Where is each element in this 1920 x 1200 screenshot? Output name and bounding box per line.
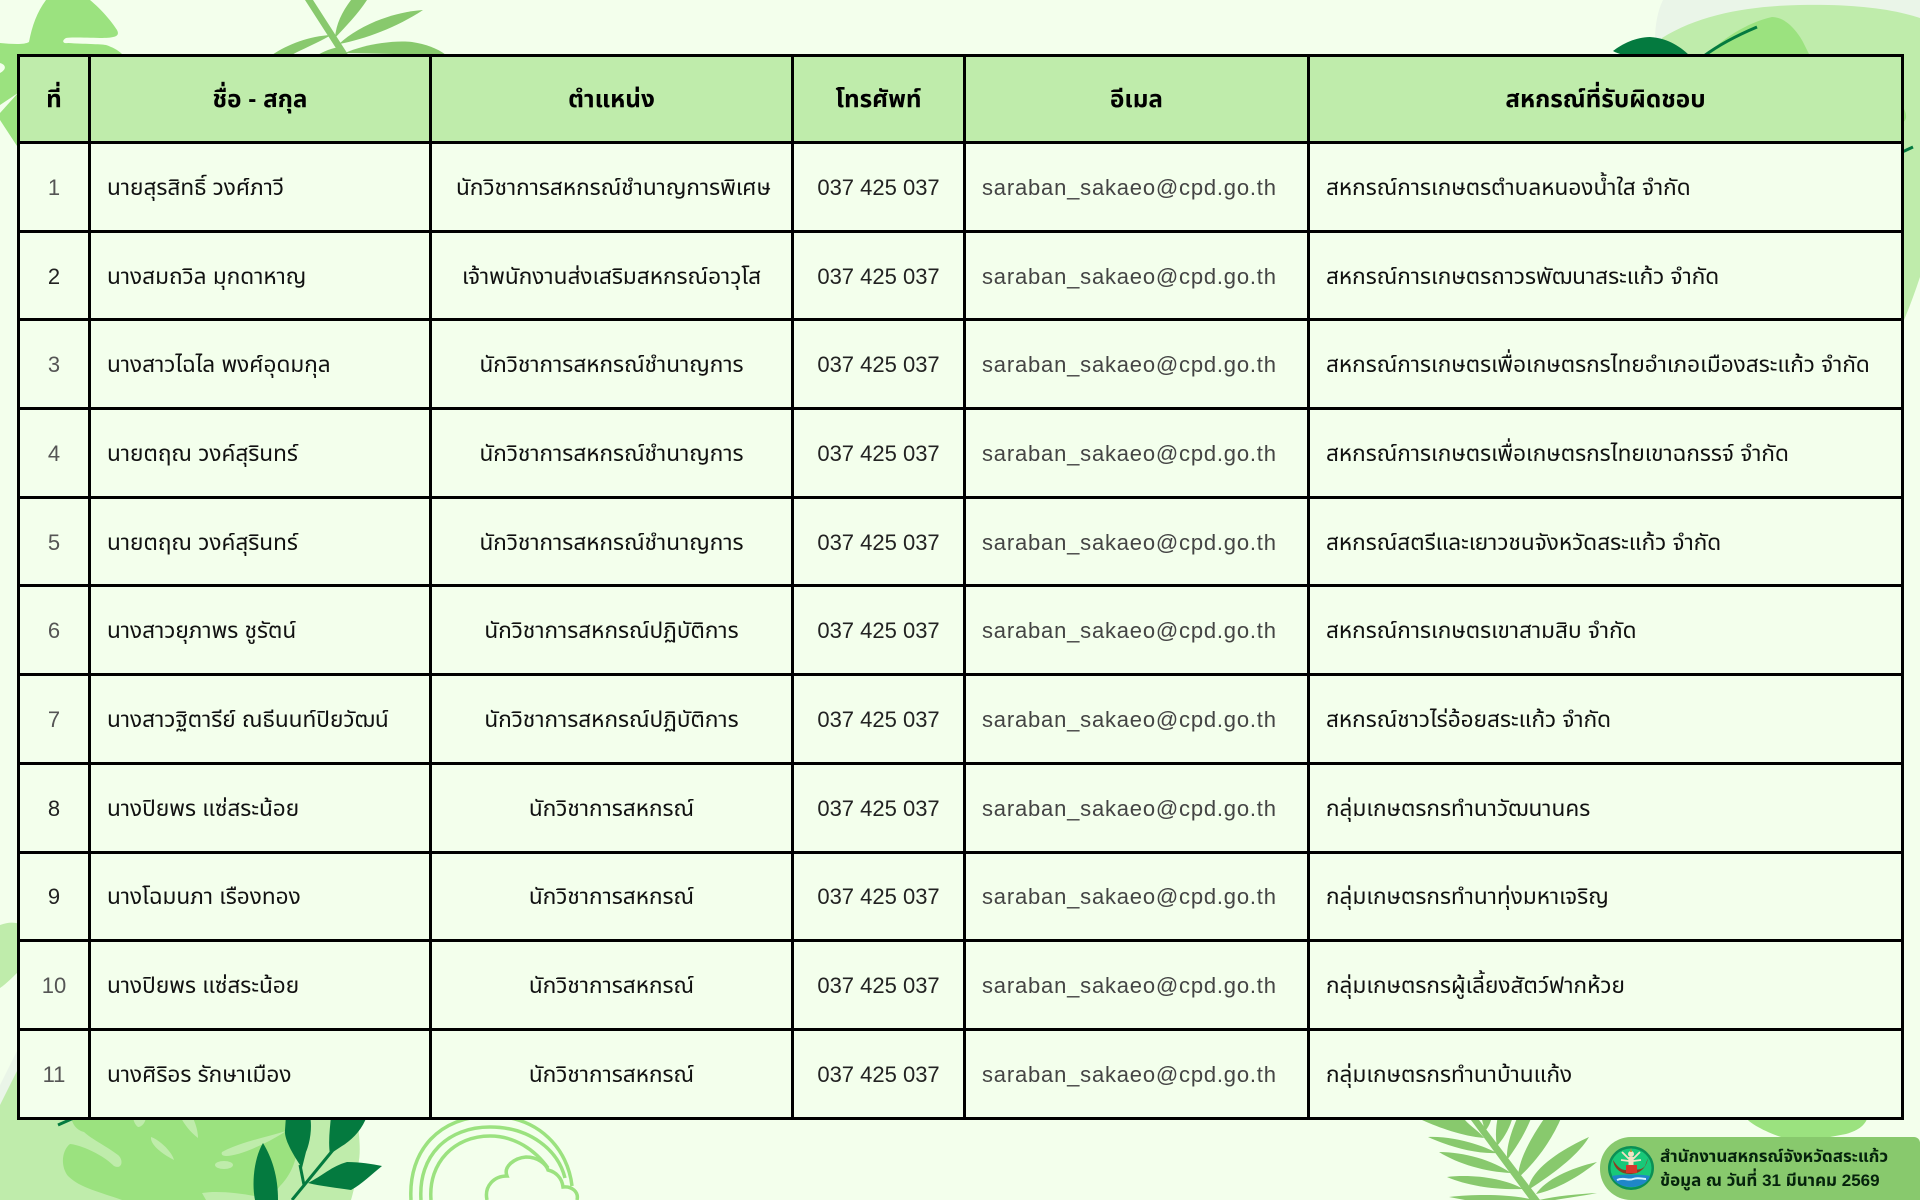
footer line 1: สำนักงานสหกรณ์จังหวัดสระแก้ว — [1660, 1147, 1888, 1166]
leaf: bottom-left monstera group — [0, 1110, 360, 1200]
leaf: bottom-right blob — [1744, 1116, 1868, 1137]
row 11: saraban_sakaeo@cpd.go.th — [982, 1062, 1277, 1087]
row 1 — [48, 172, 1691, 201]
row 3: 037 425 037 — [817, 352, 940, 377]
row 6: saraban_sakaeo@cpd.go.th — [982, 618, 1277, 643]
leaf: bottom-right palm — [1422, 1116, 1597, 1200]
row 7: สหกรณ์ชาวไร่อ้อยสระแก้ว จำกัด — [1326, 707, 1611, 732]
row 10: 10 — [42, 973, 66, 998]
leaf: top-right blobs — [1613, 0, 1920, 320]
row 11: นางศิริอร รักษาเมือง — [107, 1062, 292, 1087]
row 1: นักวิชาการสหกรณ์ชำนาญการพิเศษ — [456, 175, 771, 200]
row 5: นายตฤณ วงค์สุรินทร์ — [107, 530, 298, 555]
row 11 — [43, 1062, 1572, 1088]
row 8: นางปิยพร แซ่สระน้อย — [107, 796, 299, 821]
row 8: 8 — [48, 796, 60, 821]
row 6: 037 425 037 — [817, 618, 940, 643]
row 5: 5 — [48, 530, 60, 555]
row 4: 037 425 037 — [817, 441, 940, 466]
table header row: ชื่อ - สกุล — [213, 86, 307, 112]
row 10 — [42, 970, 1625, 999]
row 9: saraban_sakaeo@cpd.go.th — [982, 884, 1277, 909]
leaf: top-left monstera — [0, 0, 122, 146]
row 1: นายสุรสิทธิ์ วงศ์ภาวี — [107, 175, 284, 200]
row 3 — [48, 349, 1870, 378]
leaf: top bamboo sprig — [272, 0, 446, 56]
table header row: โทรศัพท์ — [835, 86, 922, 112]
table header row: อีเมล — [1110, 86, 1163, 112]
row 9: กลุ่มเกษตรกรทำนาทุ่งมหาเจริญ — [1326, 884, 1609, 909]
table header row: สหกรณ์ที่รับผิดชอบ — [1505, 86, 1706, 112]
table header row: ตำแหน่ง — [568, 86, 655, 112]
row 2 — [48, 264, 1719, 290]
row 8: 037 425 037 — [817, 796, 940, 821]
row 2: สหกรณ์การเกษตรถาวรพัฒนาสระแก้ว จำกัด — [1326, 264, 1719, 289]
row 10: นักวิชาการสหกรณ์ — [529, 973, 694, 998]
icon: cooperative logo — [1608, 1146, 1654, 1190]
row 7: 037 425 037 — [817, 707, 940, 732]
footer line 2: ข้อมูล ณ วันที่ 31 มีนาคม 2569 — [1660, 1171, 1880, 1190]
icon: rainbow and cloud outline — [411, 1116, 577, 1200]
row 3: 3 — [48, 352, 60, 377]
row 10: นางปิยพร แซ่สระน้อย — [107, 973, 299, 998]
row 9: นักวิชาการสหกรณ์ — [529, 884, 694, 909]
row 5: saraban_sakaeo@cpd.go.th — [982, 530, 1277, 555]
leaf: left edge blob — [0, 923, 20, 1125]
row 2: saraban_sakaeo@cpd.go.th — [982, 264, 1277, 289]
row 7: นักวิชาการสหกรณ์ปฏิบัติการ — [484, 707, 739, 732]
row 4: สหกรณ์การเกษตรเพื่อเกษตรกรไทยเขาฉกรรจ์ จำกัด — [1326, 441, 1789, 466]
row 3: นักวิชาการสหกรณ์ชำนาญการ — [479, 352, 744, 377]
row 6: นางสาวยุภาพร ชูรัตน์ — [107, 618, 296, 643]
row 7: 7 — [48, 707, 60, 732]
leaf: bottom-left dark sprig — [254, 1116, 382, 1200]
row 11: นักวิชาการสหกรณ์ — [529, 1062, 694, 1087]
row 4: นักวิชาการสหกรณ์ชำนาญการ — [479, 441, 744, 466]
row 5: สหกรณ์สตรีและเยาวชนจังหวัดสระแก้ว จำกัด — [1326, 530, 1721, 555]
row 7: นางสาวฐิตารีย์ ณธีนนท์ปิยวัฒน์ — [107, 707, 389, 732]
row 9: 037 425 037 — [817, 884, 940, 909]
row 11: กลุ่มเกษตรกรทำนาบ้านแก้ง — [1326, 1062, 1572, 1087]
footer badge — [1600, 1137, 1920, 1200]
row 6: นักวิชาการสหกรณ์ปฏิบัติการ — [484, 618, 739, 643]
row 11: 11 — [43, 1062, 65, 1087]
row 7: saraban_sakaeo@cpd.go.th — [982, 707, 1277, 732]
row 6: 6 — [48, 618, 60, 643]
row 11: 037 425 037 — [817, 1062, 940, 1087]
row 5: นักวิชาการสหกรณ์ชำนาญการ — [479, 530, 744, 555]
row 9: 9 — [48, 884, 60, 909]
row 1: saraban_sakaeo@cpd.go.th — [982, 175, 1277, 200]
row 3: สหกรณ์การเกษตรเพื่อเกษตรกรไทยอำเภอเมืองสระแก้ว จำกัด — [1326, 352, 1870, 377]
row 5: 037 425 037 — [817, 530, 940, 555]
row 7 — [48, 707, 1611, 732]
row 4 — [48, 438, 1789, 467]
row 2: 037 425 037 — [817, 264, 940, 289]
row 3: นางสาวไฉไล พงศ์อุดมกุล — [107, 352, 331, 377]
row 9: นางโฉมนภา เรืองทอง — [107, 884, 301, 909]
row 1: 1 — [48, 175, 60, 200]
row 9 — [48, 884, 1609, 910]
row 4: นายตฤณ วงค์สุรินทร์ — [107, 441, 298, 466]
row 10: กลุ่มเกษตรกรผู้เลี้ยงสัตว์ฟากห้วย — [1326, 973, 1625, 998]
row 6: สหกรณ์การเกษตรเขาสามสิบ จำกัด — [1326, 618, 1637, 643]
row 10: saraban_sakaeo@cpd.go.th — [982, 973, 1277, 998]
row 6 — [48, 618, 1637, 644]
row 8: saraban_sakaeo@cpd.go.th — [982, 796, 1277, 821]
row 10: 037 425 037 — [817, 973, 940, 998]
row 8 — [48, 796, 1590, 822]
table header row: ที่ — [46, 86, 62, 112]
row 5 — [48, 530, 1721, 556]
row 3: saraban_sakaeo@cpd.go.th — [982, 352, 1277, 377]
row 4: 4 — [48, 441, 60, 466]
row 2: นางสมถวิล มุกดาหาญ — [107, 264, 306, 289]
row 2: 2 — [48, 264, 60, 289]
row 1: 037 425 037 — [817, 175, 940, 200]
row 8: กลุ่มเกษตรกรทำนาวัฒนานคร — [1326, 796, 1590, 821]
row 4: saraban_sakaeo@cpd.go.th — [982, 441, 1277, 466]
row 1: สหกรณ์การเกษตรตำบลหนองน้ำใส จำกัด — [1326, 175, 1691, 200]
row 8: นักวิชาการสหกรณ์ — [529, 796, 694, 821]
row 2: เจ้าพนักงานส่งเสริมสหกรณ์อาวุโส — [462, 264, 761, 289]
